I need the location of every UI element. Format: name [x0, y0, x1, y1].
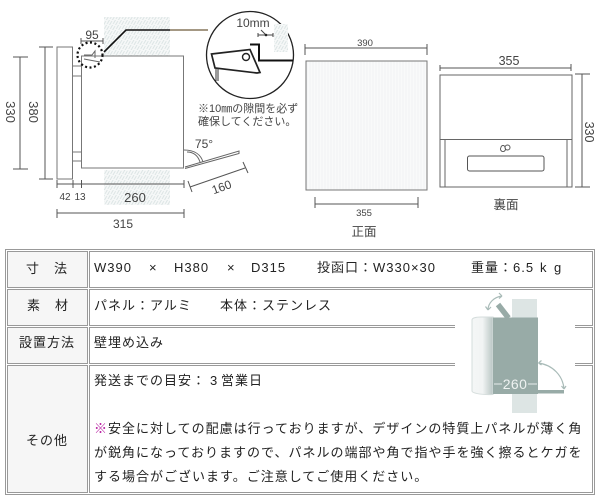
side view dimension labels: 260: [124, 190, 146, 205]
gap hatching: [274, 24, 288, 52]
row: dimensions: ×: [149, 260, 158, 275]
front view: 355: [356, 208, 372, 219]
row: dimensions: 法: [54, 261, 68, 276]
side view dimension labels: [3, 28, 234, 231]
detail magnifier circle: [206, 12, 294, 98]
installation illustration: 260: [503, 376, 527, 392]
flap right: [538, 390, 564, 394]
detail magnifier circle: 10mm: [236, 16, 270, 30]
mailbox body: [82, 56, 184, 168]
row: other: 営業日: [221, 373, 263, 388]
row: dimensions: 6.5: [513, 260, 534, 275]
depth dimensions: [57, 180, 184, 218]
hinges: [72, 66, 82, 161]
side view dimension labels: 13: [74, 192, 86, 203]
gap note: 確保してください。: [198, 114, 296, 128]
bracket section: [250, 44, 293, 60]
panel: [472, 317, 493, 395]
row: material: 素: [27, 298, 41, 313]
row: other: その他: [26, 433, 68, 448]
row: dimensions: D315: [251, 260, 286, 275]
flap top: [498, 304, 508, 318]
row: dimensions: ×: [227, 260, 236, 275]
side view drawing: [13, 17, 248, 218]
row: material: 本体：ステンレス: [220, 298, 332, 313]
side view dimension labels: 42: [59, 192, 71, 203]
panel section: [212, 50, 260, 73]
back view: 330: [582, 122, 596, 142]
side view dimension labels: 315: [113, 217, 133, 231]
row: dimensions: 投函口：W330×30: [317, 260, 436, 275]
row: dimensions: 重量：: [471, 260, 513, 275]
back dimensions: [440, 64, 590, 187]
width label: [494, 383, 537, 385]
spec table: [5, 249, 595, 495]
open flap: [184, 150, 239, 168]
row: dimensions: g: [554, 260, 562, 275]
row: dimensions: 寸: [26, 261, 40, 276]
wall hatching: [104, 17, 170, 205]
side view dimension labels: 95: [85, 28, 99, 42]
gap dimension: [258, 30, 273, 37]
row: material: [7, 289, 593, 326]
back view: [440, 54, 596, 212]
body: [493, 318, 538, 394]
height dimensions: [13, 47, 53, 179]
side view dimension labels: 330: [3, 101, 18, 123]
front view: [305, 38, 427, 239]
width dimensions: [305, 44, 427, 208]
row: other: [7, 365, 593, 493]
row: other: 発送までの目安：: [94, 373, 206, 388]
flap dimension: [188, 162, 248, 192]
back view: 355: [499, 54, 519, 68]
lock: [500, 145, 510, 152]
safety note: ※安全に対しての配慮は行っておりますが、デザインの特質上パネルが薄く角 が鋭角になっておりますので、パネルの端部や角で指や手を強く擦るとケガを する場合がございます。ご注意してご使用ください。: [94, 421, 582, 484]
front view: 正面: [351, 225, 377, 239]
row: other: 3: [210, 373, 218, 388]
row: installation: 壁埋め込み: [94, 335, 164, 350]
side view dimension labels: 75°: [195, 137, 213, 151]
gap note: ※10㎜の隙間を必ず: [198, 101, 298, 115]
row: dimensions: W390: [94, 260, 132, 275]
side view dimension labels: 380: [26, 101, 41, 123]
front view: 390: [357, 38, 373, 49]
row: installation: 設置方法: [19, 335, 75, 350]
installation illustration: [455, 290, 575, 418]
detail marker and leader line: [78, 30, 208, 68]
swing arrows: [486, 293, 566, 389]
row: dimensions: k: [540, 260, 548, 275]
mail slot: [468, 156, 544, 171]
wall strip: [512, 299, 537, 413]
row: dimensions: [7, 251, 593, 288]
back view: 裏面: [493, 198, 519, 212]
gap note: [198, 101, 298, 128]
row: material: 材: [55, 298, 69, 313]
technical drawings: [3, 10, 596, 239]
row: dimensions: H380: [174, 260, 209, 275]
row: installation: [7, 327, 593, 364]
front panel side: [57, 47, 72, 179]
row: material: パネル：アルミ: [94, 298, 192, 313]
side view dimension labels: 160: [210, 177, 234, 197]
